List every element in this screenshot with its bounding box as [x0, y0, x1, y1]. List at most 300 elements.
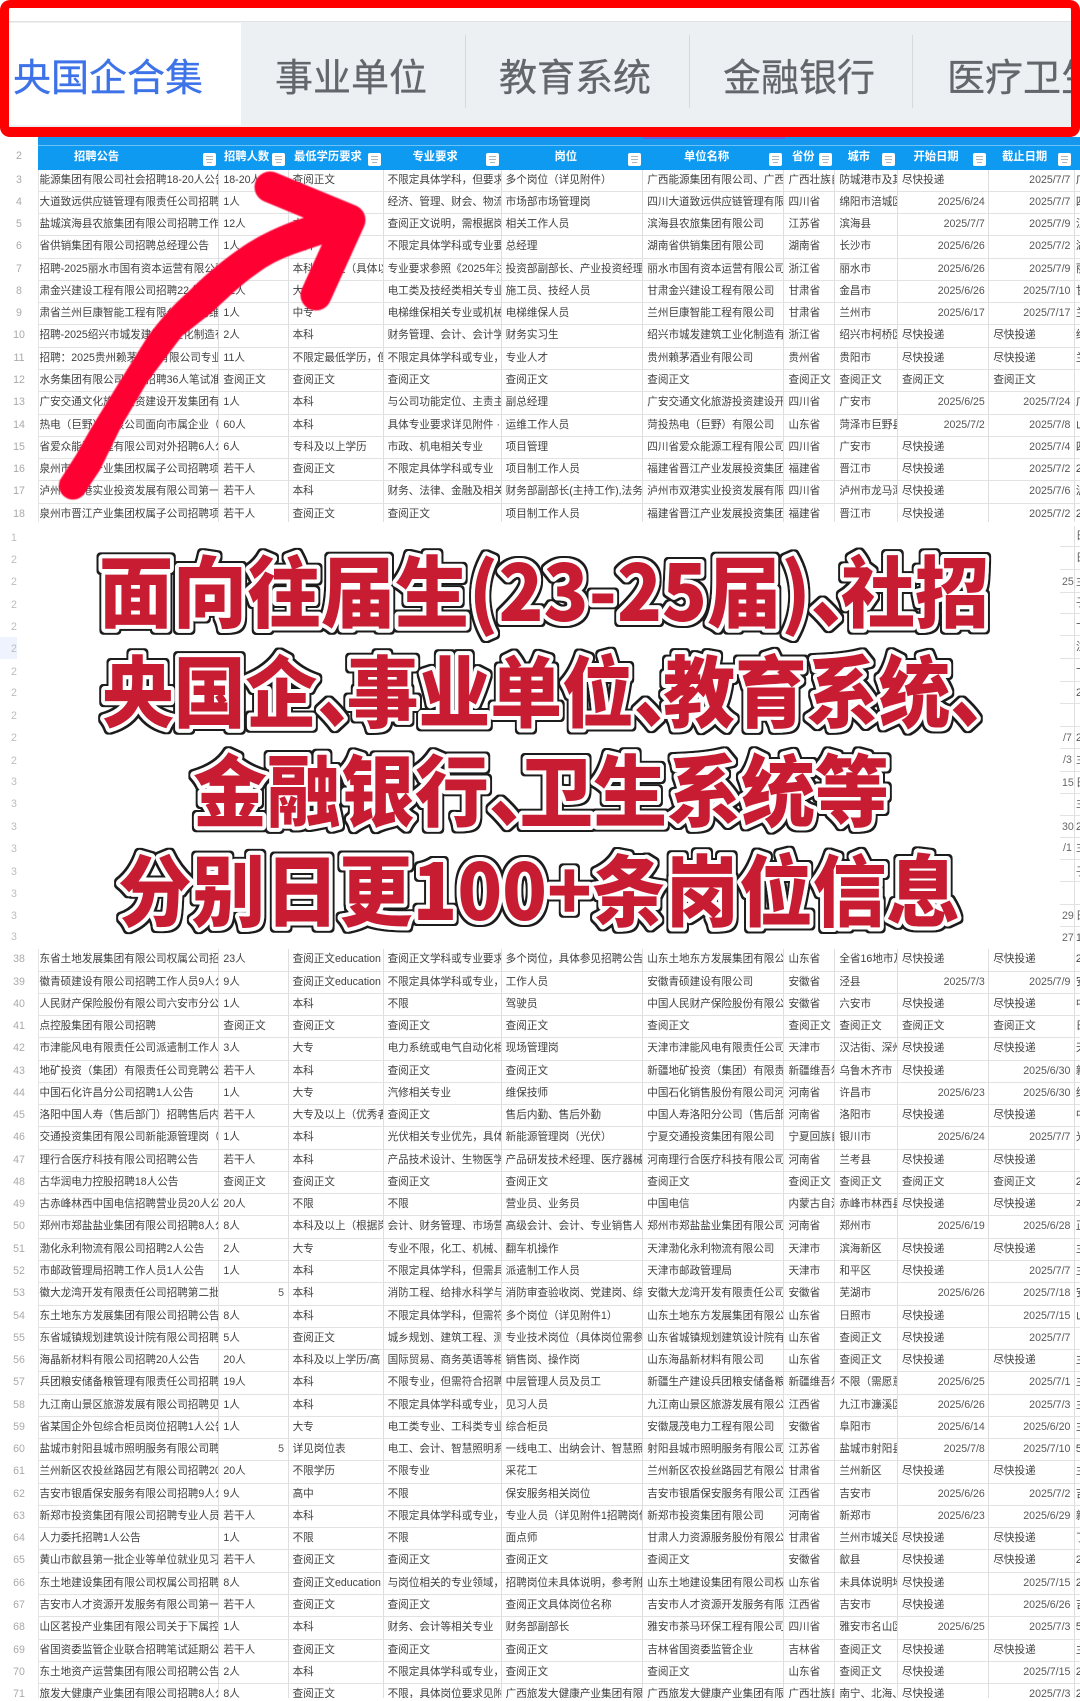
table: bottom rows of job listings: 销售岗、操作岗 — [506, 1354, 580, 1366]
table: bottom rows of job listings: 查阅正文 — [293, 1176, 335, 1188]
table: bottom rows of job listings: 9人 — [223, 976, 240, 988]
table: top rows of job listings: 晋江市 — [839, 463, 871, 475]
table: bottom rows of job listings: 泾县 — [839, 976, 861, 988]
table: top rows of job listings: 与公司功能定位、主责主 — [388, 396, 502, 408]
table: top rows of job listings: 四川省爱众能源工程有限公司 — [647, 441, 784, 453]
table: bottom rows of job listings: 吉安市 — [839, 1488, 871, 1500]
table: bottom rows of job listings: 大专 — [293, 1421, 314, 1433]
middle band: blank sheet area behind title with row-number and right-edge fragments: /7 — [1063, 732, 1072, 744]
table: bottom rows of job listings: 九江南山景区旅游发展有限公 — [647, 1399, 784, 1411]
table: bottom rows of job listings: 安徽省 — [788, 1554, 820, 1566]
table: bottom rows of job listings: 2025/6/14 — [938, 1421, 985, 1433]
table: bottom rows of job listings: 专业技术岗位（具体岗位需参 — [506, 1332, 643, 1344]
table: top rows of job listings: 甘肃金兴建设工程有限公司 — [647, 285, 774, 297]
middle band: blank sheet area behind title with row-number and right-edge fragments — [0, 526, 1080, 949]
table: bottom rows of job listings: 查阅正文 — [293, 1644, 335, 1656]
table: top rows of job listings: 本科 — [293, 396, 314, 408]
table: bottom rows of job listings: 多个岗位，具体参见招聘公告 — [506, 953, 643, 965]
table: top rows of job listings: 3 — [16, 174, 22, 186]
table: bottom rows of job listings: 查阅正文 — [506, 1176, 548, 1188]
table: top rows of job listings: 甘肃省 — [788, 285, 820, 297]
table: bottom rows of job listings: 山东海晶新材料有限公司 — [647, 1354, 764, 1366]
table: bottom rows of job listings: 2025/6/24 — [938, 1131, 985, 1143]
table: bottom rows of job listings: 2025/7/15 — [1023, 1577, 1070, 1589]
middle band: blank sheet area behind title with row-number and right-edge fragments: 2 — [11, 576, 17, 588]
table: top rows of job listings: 2025/7/2 — [944, 419, 985, 431]
table: top rows of job listings: 长沙市 — [839, 240, 871, 252]
table: bottom rows of job listings: 山东省 — [788, 1332, 820, 1344]
table: bottom rows of job listings: 兵团粮安储备粮管理有限责任公司招聘 — [40, 1376, 219, 1388]
table: bottom rows of job listings: 若干人 — [223, 1510, 255, 1522]
table: bottom rows of job listings: 产品技术设计、生物医学 — [388, 1154, 502, 1166]
table: bottom rows of job listings: 尽快投递 — [993, 1154, 1036, 1166]
table: top rows of job listings: 查阅正文 — [223, 374, 266, 386]
table: top rows of job listings: 项目制工作人员 — [506, 463, 580, 475]
middle band: blank sheet area behind title with row-number and right-edge fragments: 2 — [11, 710, 17, 722]
table: top rows of job listings: 2025/7/4 — [1029, 441, 1070, 453]
table: top rows of job listings: 7 — [16, 263, 22, 275]
table: top rows of job listings: 中专 — [293, 307, 314, 319]
tab: central and state enterprises (active): 央国企合集 — [13, 47, 203, 102]
table header row: 截止日期 — [1002, 151, 1047, 163]
table: bottom rows of job listings: 安徽青硕建设有限公司 — [647, 976, 753, 988]
table: bottom rows of job listings: 河南理行合医疗科技有限公司 — [647, 1154, 784, 1166]
table: bottom rows of job listings: 查阅正文 — [839, 1644, 882, 1656]
table: bottom rows of job listings: 东省城镇规划建筑设计院有限公司招聘 — [40, 1332, 219, 1344]
middle band: blank sheet area behind title with row-number and right-edge fragments: 2 — [11, 732, 17, 744]
table: bottom rows of job listings: 查阅正文 — [993, 1176, 1036, 1188]
table: top rows of job listings: 2025/7/2 — [1029, 508, 1070, 520]
table: bottom rows of job listings: 盐城市射阳县城市照明服务有限公司聘 — [40, 1443, 219, 1455]
table: top rows of job listings: 项目制工作人员 — [506, 508, 580, 520]
table: bottom rows of job listings: 甘肃省 — [788, 1532, 820, 1544]
table: bottom rows of job listings: 芜湖市 — [839, 1287, 871, 1299]
table: top rows of job listings: 绍兴市城发建筑工业化制造有 — [647, 329, 784, 341]
table: bottom rows of job listings: 古赤峰林西中国电信招聘营业员20人公 — [40, 1198, 219, 1210]
table: top rows of job listings: 2025/7/6 — [1029, 485, 1070, 497]
table: bottom rows of job listings: 尽快投递 — [902, 953, 944, 965]
table: bottom rows of job listings: 甘肃人力资源服务股份有限公 — [647, 1532, 784, 1544]
table: bottom rows of job listings: 财务部副部长 — [506, 1621, 569, 1633]
table: bottom rows of job listings: 查阅正文 — [839, 1666, 882, 1678]
table: bottom rows of job listings: 查阅正文 — [647, 1020, 690, 1032]
table: bottom rows of job listings: 兰州新区农投丝路园艺有限公司招聘20 — [40, 1465, 219, 1477]
table: bottom rows of job listings: 不限 — [388, 1532, 409, 1544]
table: bottom rows of job listings: 城乡规划、建筑工程、测 — [388, 1332, 502, 1344]
table: top rows of job listings: 贵州赖茅酒业有限公司 — [647, 352, 753, 364]
table: bottom rows of job listings: 2025/7/15 — [1023, 1666, 1070, 1678]
table: bottom rows of job listings: 本科 — [293, 1510, 314, 1522]
table: bottom rows of job listings: 1人 — [223, 1265, 240, 1277]
table: bottom rows of job listings: 查阅正文 — [388, 1109, 430, 1121]
table: bottom rows of job listings: 安徽省 — [788, 1287, 820, 1299]
table: bottom rows of job listings: 查阅正文 — [788, 1020, 831, 1032]
table: top rows of job listings: 2025/6/24 — [938, 196, 985, 208]
table: bottom rows of job listings: 38 — [13, 953, 25, 965]
middle band: blank sheet area behind title with row-number and right-edge fragments: 3 — [11, 798, 17, 810]
table: bottom rows of job listings: 2025/6/25 — [938, 1376, 985, 1388]
table: top rows of job listings: 市政、机电相关专业 — [388, 441, 483, 453]
table: top rows of job listings: 本科 — [293, 485, 314, 497]
table: bottom rows of job listings: 天津市 — [788, 1042, 820, 1054]
table: top rows of job listings: 2025/7/10 — [1023, 285, 1070, 297]
table: top rows of job listings: 尽快投递 — [902, 463, 944, 475]
table: bottom rows of job listings: 不限 — [293, 1198, 314, 1210]
table: bottom rows of job listings: 2025/6/23 — [938, 1510, 985, 1522]
table: top rows of job listings: 10 — [13, 329, 25, 341]
table: bottom rows of job listings: 39 — [13, 976, 25, 988]
table: top rows of job listings: 2025/7/17 — [1023, 307, 1070, 319]
table: bottom rows of job listings: 驾驶员 — [506, 998, 537, 1010]
table: top rows of job listings: 大道致远供应链管理有限责任公司招聘 — [40, 196, 219, 208]
table: bottom rows of job listings: 尽快投递 — [902, 1666, 944, 1678]
table: bottom rows of job listings: 不限定具体学科或专业， — [388, 1399, 502, 1411]
middle band: blank sheet area behind title with row-number and right-edge fragments: 27 — [1062, 932, 1074, 944]
table: top rows of job listings: 浙江省 — [788, 263, 820, 275]
table: bottom rows of job listings: 2025/6/30 — [1023, 1087, 1070, 1099]
title: four-line red outlined headline — [96, 532, 1022, 943]
table: bottom rows of job listings: 郑州市郑盐盐业集团有限公司 — [647, 1220, 784, 1232]
table: top rows of job listings: 福建省晋江产业发展投资集团 — [647, 463, 784, 475]
table: bottom rows of job listings: 查阅正文 — [902, 1020, 944, 1032]
table: top rows of job listings: 福建省 — [788, 508, 820, 520]
table: bottom rows of job listings: 2025/7/15 — [1023, 1310, 1070, 1322]
table: bottom rows of job listings: 吉安市人才资源开发服务有限公司第一 — [40, 1599, 219, 1611]
middle band: blank sheet area behind title with row-number and right-edge fragments: 3 — [11, 821, 17, 833]
table: top rows of job listings: 1人 — [223, 396, 240, 408]
table: top rows of job listings: 1人 — [223, 240, 240, 252]
table: bottom rows of job listings: 兰州新区 — [839, 1465, 882, 1477]
table: top rows of job listings: 丽水市国有资本运营有限公司 — [647, 263, 784, 275]
table header row: 开始日期 — [914, 151, 959, 163]
table: bottom rows of job listings: 理行合医疗科技有限公司招聘公告 — [40, 1154, 198, 1166]
table: bottom rows of job listings: 2025/6/28 — [1023, 1220, 1070, 1232]
table: top rows of job listings: 13 — [13, 396, 25, 408]
table: bottom rows of job listings: 日照市 — [839, 1310, 871, 1322]
table: bottom rows of job listings: 不限学历 — [293, 1465, 335, 1477]
table: bottom rows of job listings: 尽快投递 — [993, 1243, 1036, 1255]
table: bottom rows of job listings: 查阅正文 — [293, 1599, 335, 1611]
tab: public institutions: 事业单位 — [275, 47, 427, 102]
table: bottom rows of job listings: 尽快投递 — [902, 1198, 944, 1210]
table: top rows of job listings: 尽快投递 — [902, 329, 944, 341]
table: bottom rows of job listings: 宁夏交通投资集团有限公司 — [647, 1131, 774, 1143]
table: bottom rows of job listings: 查阅正文 — [506, 1554, 548, 1566]
table: bottom rows of job listings: 2025/6/26 — [938, 1488, 985, 1500]
table: bottom rows of job listings: 查阅正文 — [388, 1020, 430, 1032]
middle band: blank sheet area behind title with row-number and right-edge fragments: 2 — [11, 643, 17, 655]
table header row: 省份 — [792, 151, 815, 163]
middle band: blank sheet area behind title with row-number and right-edge fragments: 2 — [11, 755, 17, 767]
table: bottom rows of job listings: 2025/6/30 — [1023, 1065, 1070, 1077]
table: top rows of job listings: 省供销集团有限公司招聘总经理公告 — [40, 240, 209, 252]
table: bottom rows of job listings: 47 — [13, 1154, 25, 1166]
table: bottom rows of job listings: 2025/7/2 — [1029, 1488, 1070, 1500]
table: top rows of job listings: 浙江省 — [788, 329, 820, 341]
table: bottom rows of job listings: 41 — [13, 1020, 25, 1032]
table: bottom rows of job listings: 吉安市银盾保安服务有限公司 — [647, 1488, 784, 1500]
middle band: blank sheet area behind title with row-number and right-edge fragments: 25 — [1062, 576, 1074, 588]
table: top rows of job listings: 肃金兴建设工程有限公司招聘22人 — [40, 285, 200, 297]
table: bottom rows of job listings: 不限专业，但需符合招聘 — [388, 1376, 502, 1388]
table: bottom rows of job listings: 52 — [13, 1265, 25, 1277]
table: bottom rows of job listings: 吉林省 — [788, 1644, 820, 1656]
table: top rows of job listings: 施工员、技经人员 — [506, 285, 590, 297]
table: top rows of job listings: 湖南省供销集团有限公司 — [647, 240, 764, 252]
table: top rows of job listings: 2025/6/26 — [938, 240, 985, 252]
table: bottom rows of job listings: 东省土地发展集团有限公司权属公司招 — [40, 953, 219, 965]
table: bottom rows of job listings: 查阅正文 — [839, 1332, 882, 1344]
table: bottom rows of job listings: 尽快投递 — [993, 998, 1036, 1010]
table: bottom rows of job listings: 2025/6/26 — [938, 1287, 985, 1299]
table: bottom rows of job listings: 本科 — [293, 1666, 314, 1678]
table: bottom rows of job listings: 兰州新区农投丝路园艺有限公 — [647, 1465, 784, 1477]
table: bottom rows of job listings: 若干人 — [223, 1065, 255, 1077]
table: top rows of job listings: 尽快投递 — [902, 174, 944, 186]
table: bottom rows of job listings: 洛阳中国人寿（售后部门）招聘售后内 — [40, 1109, 219, 1121]
table: bottom rows of job listings: 本科 — [293, 1265, 314, 1277]
table: top rows of job listings: 12人 — [223, 218, 246, 230]
table: top rows of job listings: 多个岗位（详见附件） — [506, 174, 612, 186]
table: bottom rows of job listings: 尽快投递 — [902, 1465, 944, 1477]
table: bottom rows of job listings: 面点师 — [506, 1532, 537, 1544]
table: bottom rows of job listings: 安徽省 — [788, 1421, 820, 1433]
table: top rows of job listings: 四川省 — [788, 196, 820, 208]
table: top rows of job listings: 16 — [13, 463, 25, 475]
table: bottom rows of job listings: 51 — [13, 1243, 25, 1255]
table: bottom rows of job listings: 滨海新区 — [839, 1243, 882, 1255]
table: bottom rows of job listings: 9人 — [223, 1488, 240, 1500]
table: bottom rows of job listings: 查阅正文 — [506, 1065, 548, 1077]
title line 1: 面向往届生(23-25届)、社招 — [99, 532, 989, 644]
table: bottom rows of job listings: 不限定具体学科或专业， — [388, 1666, 502, 1678]
table: bottom rows of job listings: 山区茗投产业集团有限公司关于下属控 — [40, 1621, 219, 1633]
table: bottom rows of job listings: 人力委托招聘1人公告 — [40, 1532, 141, 1544]
table: bottom rows of job listings: 交通投资集团有限公司新能源管理岗（ — [40, 1131, 219, 1143]
table: bottom rows of job listings: 1人 — [223, 998, 240, 1010]
table: bottom rows of job listings: 20人 — [223, 1198, 246, 1210]
table: bottom rows of job listings: 查阅正文 — [223, 1020, 266, 1032]
table: top rows of job listings: 查阅正文 — [293, 508, 335, 520]
table: bottom rows of job listings: 2025/7/1 — [1029, 1376, 1070, 1388]
arrow: red curved arrow pointing to header — [58, 170, 366, 500]
table: bottom rows of job listings: 5 — [278, 1443, 284, 1455]
table: bottom rows of job listings: 67 — [13, 1599, 25, 1611]
table: bottom rows of job listings: 8人 — [223, 1577, 240, 1589]
table: bottom rows of job listings: 46 — [13, 1131, 25, 1143]
table: top rows of job listings: 电梯维保人员 — [506, 307, 569, 319]
table: top rows of job listings: 查阅正文 — [839, 374, 882, 386]
table: top rows of job listings: 广安交通文化旅游投资建设开发集团有 — [40, 396, 219, 408]
table: top rows of job listings — [13, 170, 1080, 522]
table: top rows of job listings: 2025/6/26 — [938, 263, 985, 275]
table: bottom rows of job listings: 山东土地东方发展集团有限公 — [647, 1310, 784, 1322]
table: bottom rows of job listings: 尽快投递 — [902, 1644, 944, 1656]
table: top rows of job listings: 22人 — [223, 285, 246, 297]
table: bottom rows of job listings: 山东省城镇规划建筑设计院有 — [647, 1332, 784, 1344]
table: bottom rows of job listings: 电力系统或电气自动化相 — [388, 1042, 502, 1054]
table: bottom rows of job listings: 天津市邮政管理局 — [647, 1265, 732, 1277]
table: top rows of job listings: 热电（巨野）有限公司面向市属企业（ — [40, 419, 219, 431]
table: bottom rows of job listings: 70 — [13, 1666, 25, 1678]
table: top rows of job listings: 肃省兰州巨康智能工程有限公司招聘维 — [40, 307, 219, 319]
row number 2: 2 — [16, 150, 22, 162]
table: bottom rows of job listings: 若干人 — [223, 1644, 255, 1656]
table: bottom rows of job listings: 尽快投递 — [993, 1109, 1036, 1121]
table: top rows of job listings: 湖南省 — [788, 240, 820, 252]
table: bottom rows of job listings: 查阅正文 — [293, 1332, 335, 1344]
table: bottom rows of job listings: 尽快投递 — [993, 1554, 1036, 1566]
table: bottom rows of job listings: 查阅正文 — [902, 1176, 944, 1188]
table: bottom rows of job listings: 2人 — [223, 1666, 240, 1678]
table: bottom rows of job listings: 银川市 — [839, 1131, 871, 1143]
table: bottom rows of job listings: 若干人 — [223, 1599, 255, 1611]
table: bottom rows of job listings: 点控股集团有限公司招聘 — [40, 1020, 156, 1032]
table: bottom rows of job listings: 55 — [13, 1332, 25, 1344]
table: top rows of job listings: 5 — [16, 218, 22, 230]
table: top rows of job listings: 四川省 — [788, 396, 820, 408]
table: bottom rows of job listings: 新能源管理岗（光伏） — [506, 1131, 612, 1143]
table: bottom rows of job listings: 40 — [13, 998, 25, 1010]
table: bottom rows of job listings: 新疆地矿投资（集团）有限责 — [647, 1065, 784, 1077]
table: bottom rows of job listings: 查阅正文 — [993, 1020, 1036, 1032]
table: bottom rows of job listings: 多个岗位（详见附件1） — [506, 1310, 618, 1322]
table: top rows of job listings: 查阅正文 — [647, 374, 690, 386]
table: bottom rows of job listings: 查阅正文 — [293, 1554, 335, 1566]
table: top rows of job listings: 广安交通文化旅游投资建设开 — [647, 396, 784, 408]
table: bottom rows of job listings: 不限 — [293, 1532, 314, 1544]
table: bottom rows of job listings: 54 — [13, 1310, 25, 1322]
table: bottom rows of job listings: 43 — [13, 1065, 25, 1077]
table: bottom rows of job listings: 中国电信 — [647, 1198, 690, 1210]
middle band: blank sheet area behind title with row-number and right-edge fragments: 3 — [11, 776, 17, 788]
table: bottom rows of job listings: 产品研发技术经理、医疗器械 — [506, 1154, 643, 1166]
table: bottom rows of job listings: 48 — [13, 1176, 25, 1188]
table: bottom rows of job listings: 中国人寿洛阳分公司（售后部 — [647, 1109, 784, 1121]
selected column accent line — [643, 137, 785, 139]
table: bottom rows of job listings: 河南省 — [788, 1109, 820, 1121]
table: top rows of job listings: 12 — [13, 374, 25, 386]
table: bottom rows of job listings: 1人 — [223, 1421, 240, 1433]
table: bottom rows of job listings: 49 — [13, 1198, 25, 1210]
table: bottom rows of job listings: 3人 — [223, 1042, 240, 1054]
tab: finance and banking: 金融银行 — [723, 47, 875, 102]
table: bottom rows of job listings: 2025/6/23 — [938, 1087, 985, 1099]
middle band: blank sheet area behind title with row-number and right-edge fragments: 3 — [11, 910, 17, 922]
table: bottom rows of job listings: 大专 — [293, 1087, 314, 1099]
table top strip — [38, 137, 1080, 146]
table: bottom rows of job listings: 57 — [13, 1376, 25, 1388]
middle band: blank sheet area behind title with row-number and right-edge fragments: 3 — [11, 866, 17, 878]
table: bottom rows of job listings: 44 — [13, 1087, 25, 1099]
table: bottom rows of job listings: 68 — [13, 1621, 25, 1633]
table: bottom rows of job listings: 尽快投递 — [902, 1532, 944, 1544]
table: bottom rows of job listings: 光伏相关专业优先，具体 — [388, 1131, 502, 1143]
table: bottom rows of job listings: 2025/7/7 — [1029, 1131, 1070, 1143]
table: bottom rows of job listings: 人民财产保险股份有限公司六安市分公 — [40, 998, 219, 1010]
table: bottom rows of job listings: 郑州市 — [839, 1220, 871, 1232]
table: bottom rows of job listings: 不限 — [388, 1488, 409, 1500]
table: bottom rows of job listings: 中层管理人员及员工 — [506, 1376, 601, 1388]
table: bottom rows of job listings: 不限 — [388, 1198, 409, 1210]
table: bottom rows of job listings: 山东省 — [788, 1577, 820, 1589]
table: bottom rows of job listings: 大专 — [293, 1243, 314, 1255]
table: bottom rows of job listings: 尽快投递 — [993, 1042, 1036, 1054]
table: bottom rows of job listings: 四川省 — [788, 1621, 820, 1633]
table: top rows of job listings: 查阅正文 — [902, 374, 944, 386]
table: top rows of job listings: 泉州市晋江产业集团权属子公司招聘项 — [40, 463, 219, 475]
table: top rows of job listings: 18-20人 — [223, 174, 261, 186]
table: top rows of job listings: 2025/7/9 — [1029, 263, 1070, 275]
table: bottom rows of job listings: 63 — [13, 1510, 25, 1522]
table: bottom rows of job listings: 查阅正文 — [223, 1176, 266, 1188]
table: top rows of job listings: 2025/7/7 — [1029, 174, 1070, 186]
table: bottom rows of job listings: 1人 — [223, 1087, 240, 1099]
table: bottom rows of job listings: 市津能风电有限责任公司派遣制工作人 — [40, 1042, 219, 1054]
middle band: blank sheet area behind title with row-number and right-edge fragments: 2 — [11, 621, 17, 633]
table: bottom rows of job listings: 财务、会计等相关专业 — [388, 1621, 494, 1633]
table: bottom rows of job listings: 山东省 — [788, 1310, 820, 1322]
table: bottom rows of job listings: 65 — [13, 1554, 25, 1566]
table: top rows of job listings: 查阅正文 — [506, 374, 548, 386]
table: top rows of job listings: 2025/7/8 — [1029, 419, 1070, 431]
table: bottom rows of job listings: 66 — [13, 1577, 25, 1589]
table: bottom rows of job listings: 查阅正文 — [293, 1020, 335, 1032]
table: bottom rows of job listings: 查阅正文 — [647, 1176, 690, 1188]
middle band: blank sheet area behind title with row-number and right-edge fragments: /1 — [1063, 842, 1072, 854]
table: bottom rows of job listings: 本科 — [293, 1399, 314, 1411]
table: bottom rows of job listings: 河南省 — [788, 1220, 820, 1232]
table: bottom rows of job listings: 5 — [278, 1287, 284, 1299]
table: top rows of job listings: 副总经理 — [506, 396, 548, 408]
table: top rows of job listings: 9 — [16, 307, 22, 319]
table: bottom rows of job listings: 不限 — [388, 998, 409, 1010]
table: bottom rows of job listings: 见习人员 — [506, 1399, 548, 1411]
table: bottom rows of job listings: 查阅正文 — [388, 1644, 430, 1656]
table: top rows of job listings: 若干人 — [223, 508, 255, 520]
middle band: blank sheet area behind title with row-number and right-edge fragments: 2 — [11, 599, 17, 611]
table: bottom rows of job listings: 查阅正文 — [388, 1599, 430, 1611]
table: bottom rows of job listings: 售后内勤、售后外勤 — [506, 1109, 601, 1121]
table: bottom rows of job listings: 东土地东方发展集团有限公司招聘公告 — [40, 1310, 219, 1322]
table: bottom rows of job listings: 海晶新材料有限公司招聘20人公告 — [40, 1354, 200, 1366]
table: bottom rows of job listings: 本科 — [293, 1376, 314, 1388]
table: top rows of job listings: 15 — [13, 441, 25, 453]
table header row — [38, 146, 1080, 170]
table: bottom rows of job listings: 尽快投递 — [993, 1354, 1036, 1366]
table: bottom rows of job listings: 安徽省 — [788, 976, 820, 988]
table: bottom rows of job listings: 若干人 — [223, 1109, 255, 1121]
table: bottom rows of job listings: 本科 — [293, 1310, 314, 1322]
table: bottom rows of job listings: 与岗位相关的专业领域， — [388, 1577, 502, 1589]
table: bottom rows of job listings: 汽修相关专业 — [388, 1087, 451, 1099]
table: bottom rows of job listings: 查阅正文学科或专业要求 — [388, 953, 502, 965]
table: top rows of job listings: 滨海县 — [839, 218, 871, 230]
table: top rows of job listings: 广安市 — [839, 396, 871, 408]
table: top rows of job listings: 兰州市 — [839, 307, 871, 319]
table: bottom rows of job listings: 2人 — [223, 1243, 240, 1255]
table: bottom rows of job listings: 23人 — [223, 953, 246, 965]
table: bottom rows of job listings: 不限定具体学科或专业， — [388, 976, 502, 988]
table: top rows of job listings: 财务、法律、金融及相关 — [388, 485, 502, 497]
table: bottom rows of job listings: 新郑市投资集团有限公司 — [647, 1510, 764, 1522]
table: top rows of job listings: 甘肃省 — [788, 307, 820, 319]
table: top rows of job listings: 招聘：2025贵州赖茅酒业有限公司专业 — [40, 352, 219, 364]
table: bottom rows of job listings: 查阅正文 — [839, 1176, 882, 1188]
table: bottom rows of job listings: 查阅正文education — [293, 976, 381, 988]
table: bottom rows of job listings: 2025/7/8 — [944, 1443, 985, 1455]
table header row: 岗位 — [554, 151, 577, 163]
